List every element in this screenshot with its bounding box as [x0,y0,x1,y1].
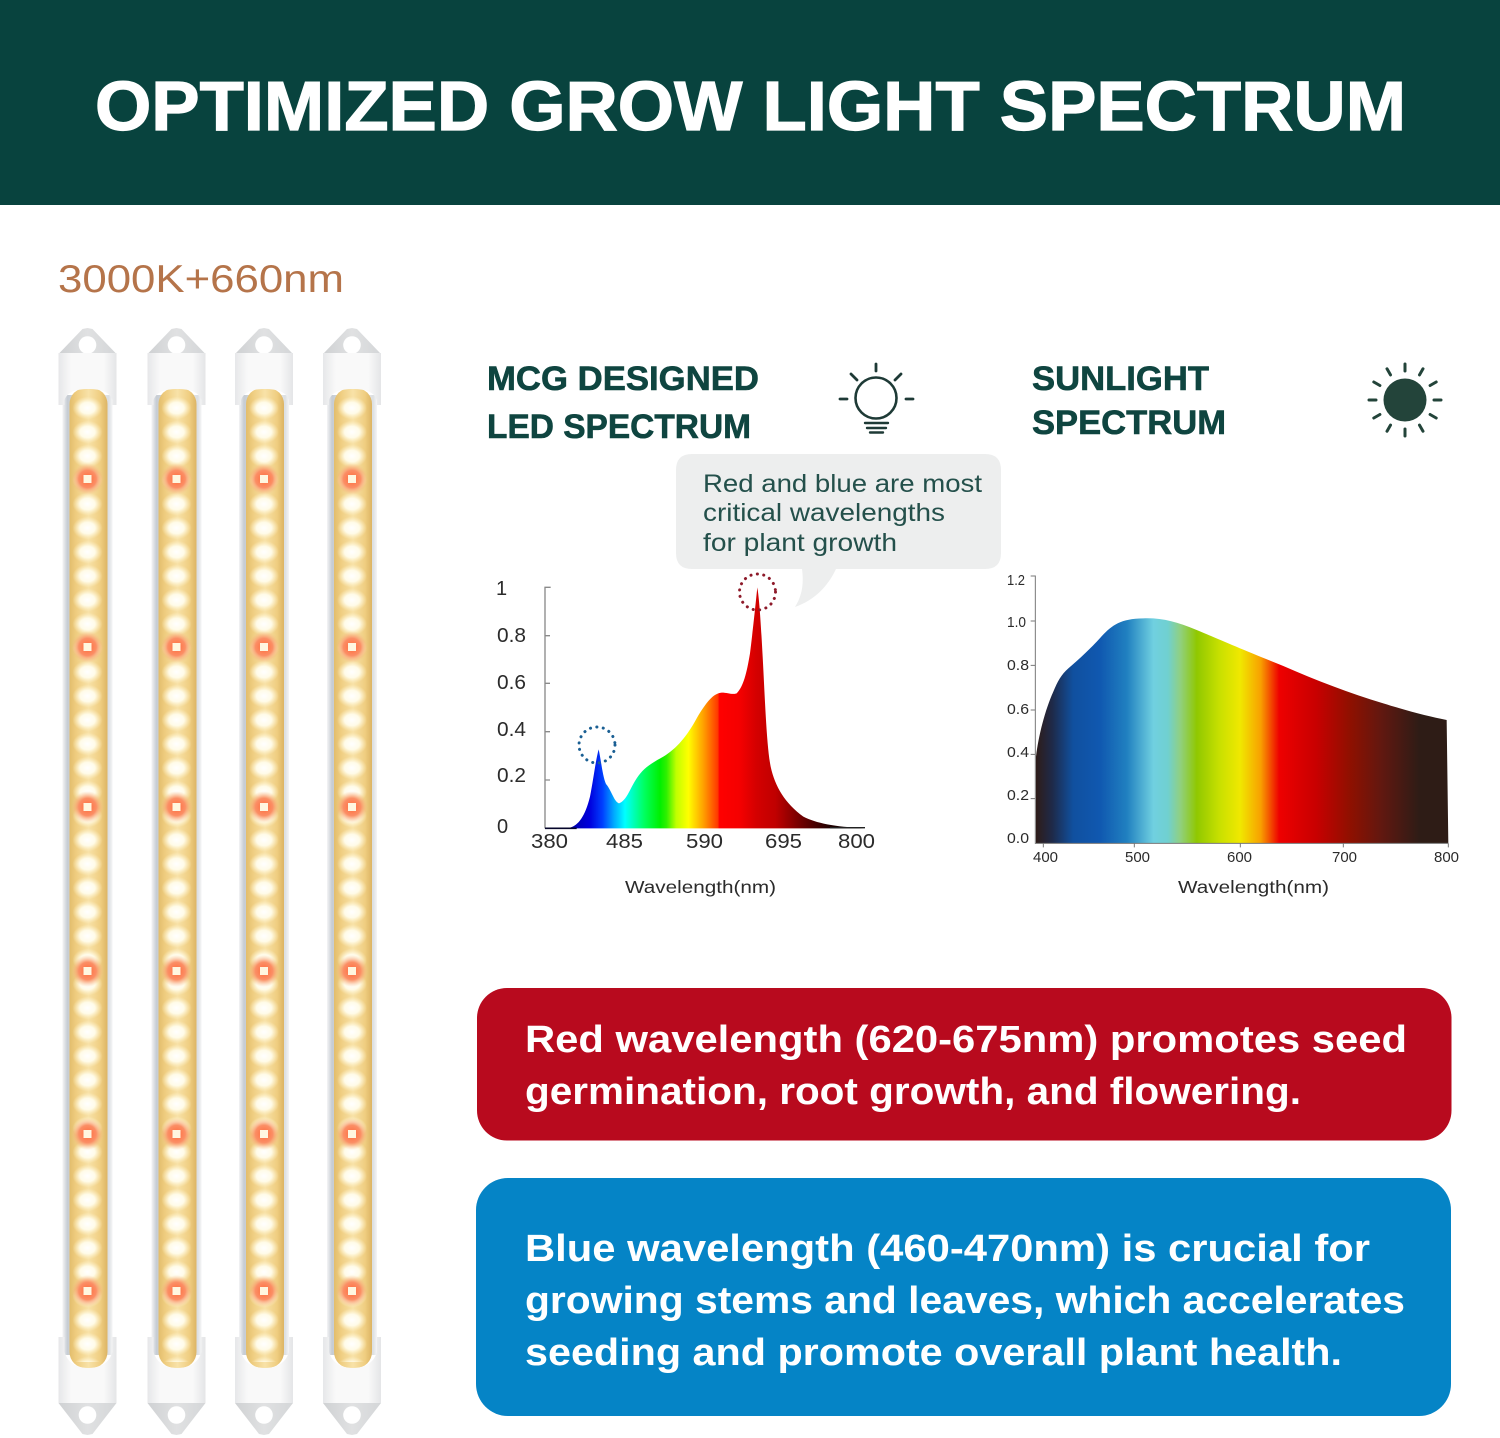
title banner [0,0,1500,205]
x axis labels [531,831,875,853]
x axis labels: 380 [531,831,568,853]
x axis labels: 400 [1033,849,1058,866]
panel: red wavelength: germination, root growth, and flowering. [525,1071,1301,1113]
y axis labels [1007,572,1029,847]
y axis labels: 0.0 [1007,830,1029,847]
y axis labels: 0.8 [1007,657,1029,674]
LED light bar 2 [148,328,206,1435]
y axis labels: 0.6 [1007,701,1029,718]
x axis labels: 500 [1125,849,1150,866]
LED light bar 3 [235,328,293,1435]
heading: MCG designed LED spectrum: MCG DESIGNED [487,360,759,398]
chart: LED spectrum [496,574,875,897]
y axis labels: 0.2 [497,765,526,787]
x axis labels: 485 [606,831,643,853]
callout: red and blue wavelengths: for plant growth [703,529,897,557]
x axis title: Wavelength(nm) [1178,877,1329,897]
panel: red wavelength: Red wavelength (620-675nm) promotes seed [525,1019,1407,1061]
y axis labels: 0.2 [1007,787,1029,804]
x axis labels: 800 [838,831,875,853]
callout: red and blue wavelengths: Red and blue are most [703,470,982,498]
panel: blue wavelength: growing stems and leaves, which accelerates [525,1280,1405,1322]
y axis labels: 0.4 [497,719,526,741]
callout: red and blue wavelengths [676,454,1001,607]
heading: MCG designed LED spectrum: LED SPECTRUM [487,408,751,446]
heading: MCG designed LED spectrum [487,360,759,446]
x axis labels: 700 [1332,849,1357,866]
LED light bar 4 [323,328,381,1435]
y axis labels: 0.4 [1007,744,1029,761]
heading: sunlight spectrum: SPECTRUM [1032,404,1226,442]
panel: blue wavelength: Blue wavelength (460-470nm) is crucial for [525,1228,1370,1270]
y axis labels: 1.0 [1007,614,1026,631]
title banner: OPTIMIZED GROW LIGHT SPECTRUM [95,67,1406,145]
color temperature label: 3000K+660nm [58,258,344,301]
x axis labels: 695 [765,831,802,853]
peak marker: red [740,574,776,610]
x axis title: Wavelength(nm) [625,877,776,897]
y axis labels: 0.6 [497,672,526,694]
panel: blue wavelength: seeding and promote overall plant health. [525,1332,1342,1374]
heading: sunlight spectrum: SUNLIGHT [1032,360,1209,398]
x axis labels: 590 [686,831,723,853]
y axis labels: 1 [496,578,507,600]
panel: blue wavelength [476,1178,1451,1416]
y axis labels: 1.2 [1007,572,1025,589]
heading: sunlight spectrum [1032,360,1226,442]
spectrum curve with axes [1031,576,1448,847]
spectrum curve with axes [545,587,865,828]
y axis labels: 0 [497,816,508,838]
x axis labels: 800 [1434,849,1459,866]
chart: sunlight spectrum [1007,572,1459,897]
icon: sun [1369,364,1441,436]
callout: red and blue wavelengths: critical wavelengths [703,499,945,527]
panel: red wavelength [477,988,1452,1140]
x axis labels [1033,849,1459,866]
icon: light bulb [840,364,913,432]
x axis labels: 600 [1227,849,1252,866]
y axis labels: 0.8 [497,625,526,647]
y axis labels [496,578,526,838]
LED light bar 1 [58,328,116,1435]
peak marker: blue [579,727,615,763]
